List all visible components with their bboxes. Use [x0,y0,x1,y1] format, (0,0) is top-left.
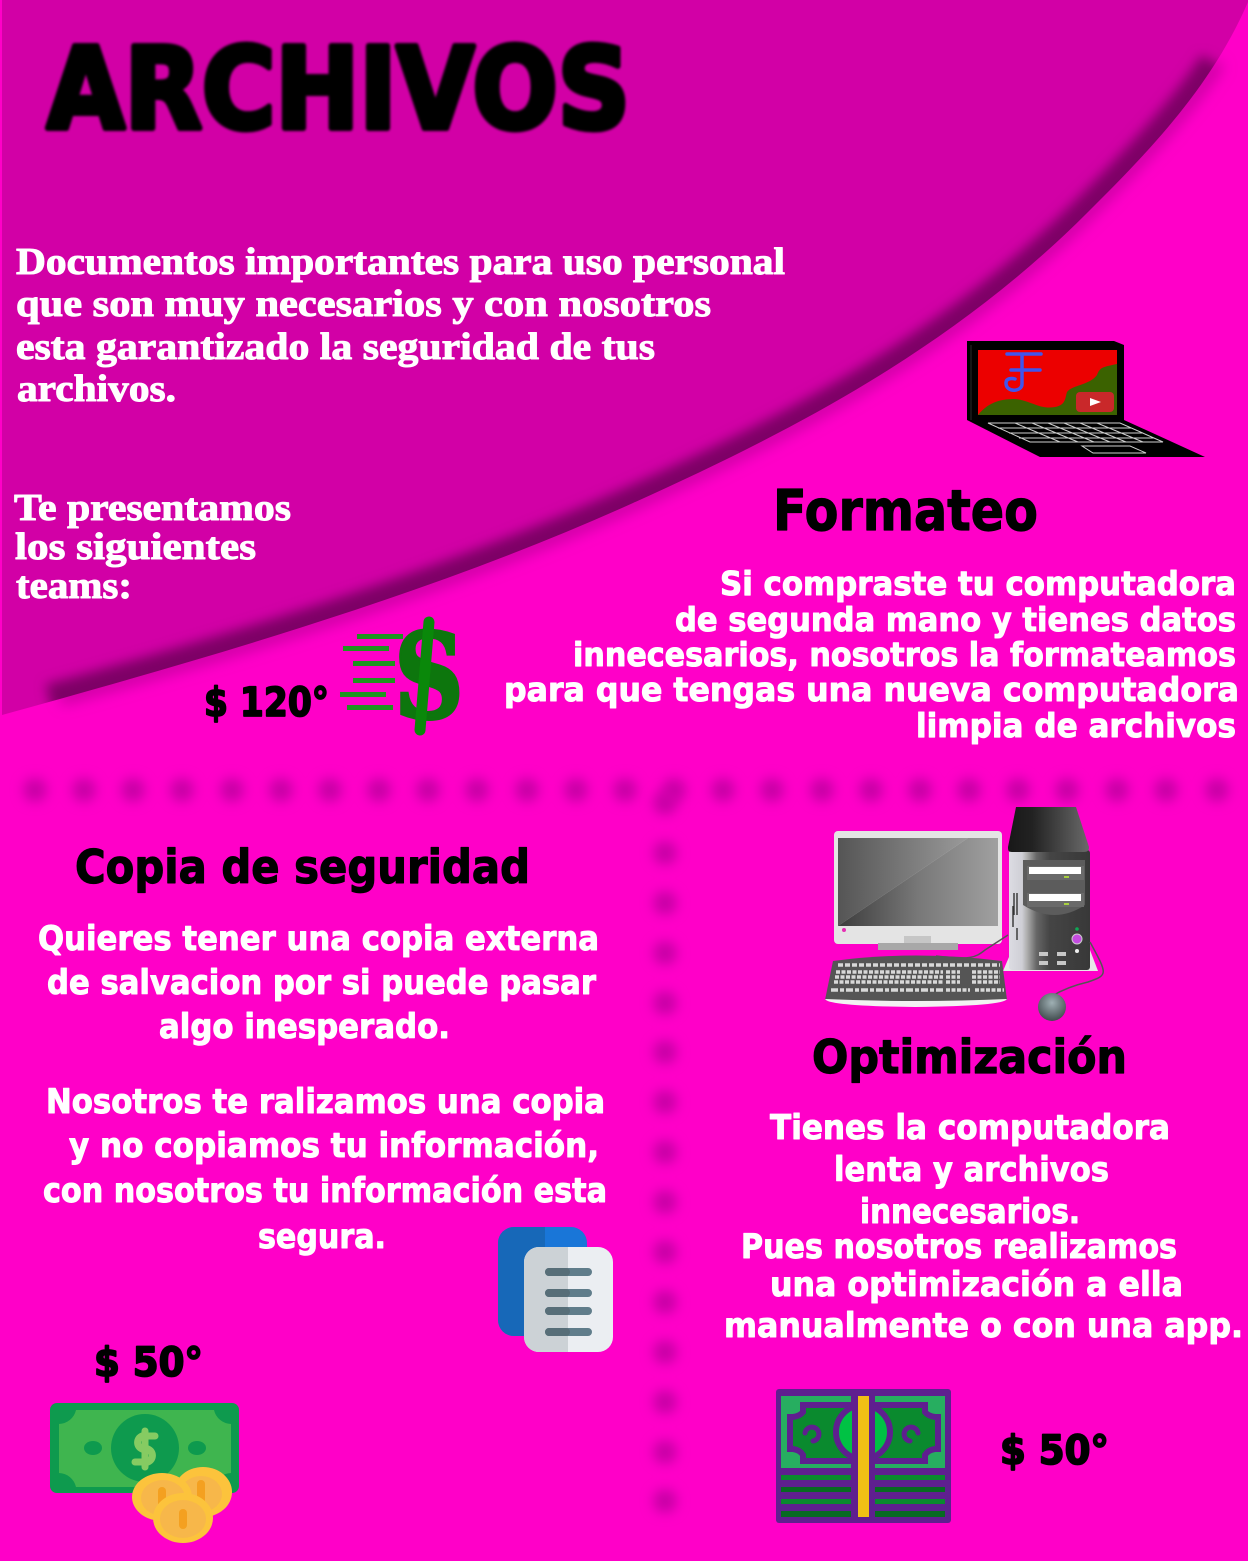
icon: stack of banknotes [776,1389,951,1523]
heading: Optimización: Optimización [812,1030,1127,1084]
Formateo description [504,564,1239,745]
icon: desktop computer [825,807,1103,1021]
Optimización description: una optimización a ella [770,1265,1183,1305]
Optimización description: Pues nosotros realizamos [741,1227,1177,1267]
heading: Formateo: Formateo [773,479,1038,544]
heading: Copia de seguridad: Copia de seguridad [75,840,530,894]
teams intro text: teams: [16,565,132,607]
icon: banknote and coins [50,1403,239,1543]
Optimización description [724,1108,1243,1346]
title: ARCHIVOS [47,25,630,155]
icon: fast dollar: S [394,607,464,746]
price: 50 left: $ 50° [94,1340,203,1386]
icon: laptop [967,341,1205,457]
intro text block: esta garantizado la seguridad de tus [16,326,655,368]
teams intro text: los siguientes [15,526,256,568]
Copia description [38,919,607,1257]
Optimización description: innecesarios. [860,1192,1080,1232]
Optimización description: lenta y archivos [834,1150,1109,1190]
price: 120: $ 120° [204,680,329,726]
Formateo description: limpia de archivos [916,706,1236,745]
teams intro text: Te presentamos [14,487,291,529]
dotted divider: vertical [653,791,677,1513]
Copia description: Nosotros te ralizamos una copia [46,1082,605,1122]
dotted divider: horizontal [23,778,1229,802]
icon: fast dollar [340,607,464,746]
panel: shaded top band with curved edge [2,0,1248,715]
Optimización description: Tienes la computadora [770,1108,1170,1148]
Copia description: algo inesperado. [159,1007,450,1047]
intro text block: Documentos importantes para uso personal [16,241,785,283]
Copia description: Quieres tener una copia externa [38,919,599,959]
icon: documents [498,1227,613,1352]
Copia description: de salvacion por si puede pasar [47,963,596,1003]
Copia description: segura. [258,1217,386,1257]
Copia description: y no copiamos tu información, [69,1126,599,1166]
intro text block: que son muy necesarios y con nosotros [16,283,711,325]
Copia description: con nosotros tu información esta [43,1171,607,1211]
teams intro text [14,487,291,607]
intro text block [16,241,785,410]
price: 50 right: $ 50° [1000,1428,1109,1474]
intro text block: archivos. [17,368,176,410]
